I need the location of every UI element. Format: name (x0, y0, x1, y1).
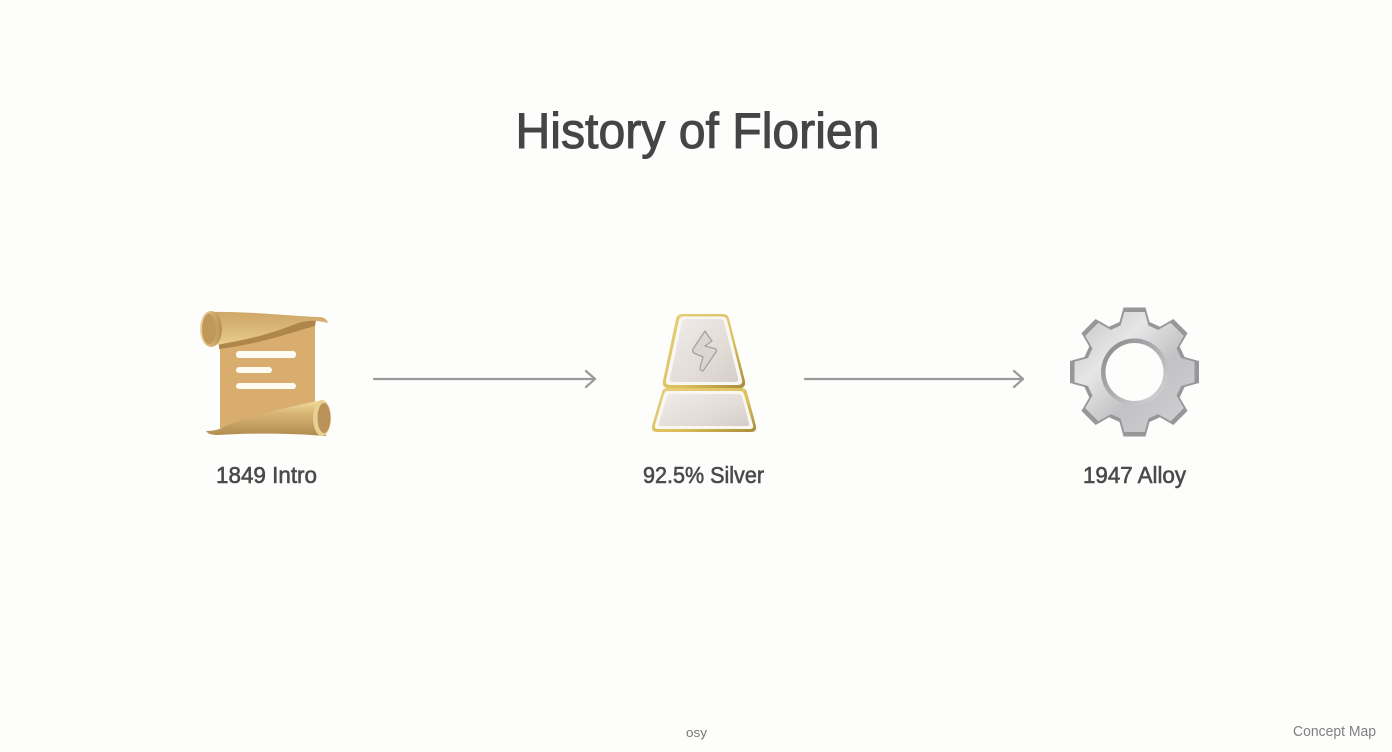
icon: parchment scroll (200, 311, 331, 436)
lightning emblem (693, 331, 716, 371)
top left roll (200, 311, 222, 347)
bottom curled flap (206, 400, 326, 436)
top curled flap (208, 312, 328, 345)
scroll sheet (220, 320, 315, 428)
bottom right roll (313, 400, 331, 436)
text lines on scroll (236, 351, 296, 358)
label: 1849 Intro: 1849 Intro (216, 462, 317, 488)
arrow: silver to alloy (805, 371, 1023, 387)
arrow: scroll to silver (374, 371, 595, 387)
footer label: Concept Map: Concept Map (1293, 724, 1376, 740)
title: History of Florien (516, 103, 880, 159)
label: 92.5% Silver: 92.5% Silver (643, 462, 764, 488)
upper ingot block (663, 314, 745, 388)
shadow under top flap (219, 320, 316, 349)
footer centre text: osy (686, 725, 708, 740)
icon: silver ingot (652, 314, 756, 432)
lower ingot block (652, 388, 756, 432)
icon: alloy gear (1070, 308, 1199, 436)
label: 1947 Alloy: 1947 Alloy (1083, 462, 1186, 488)
